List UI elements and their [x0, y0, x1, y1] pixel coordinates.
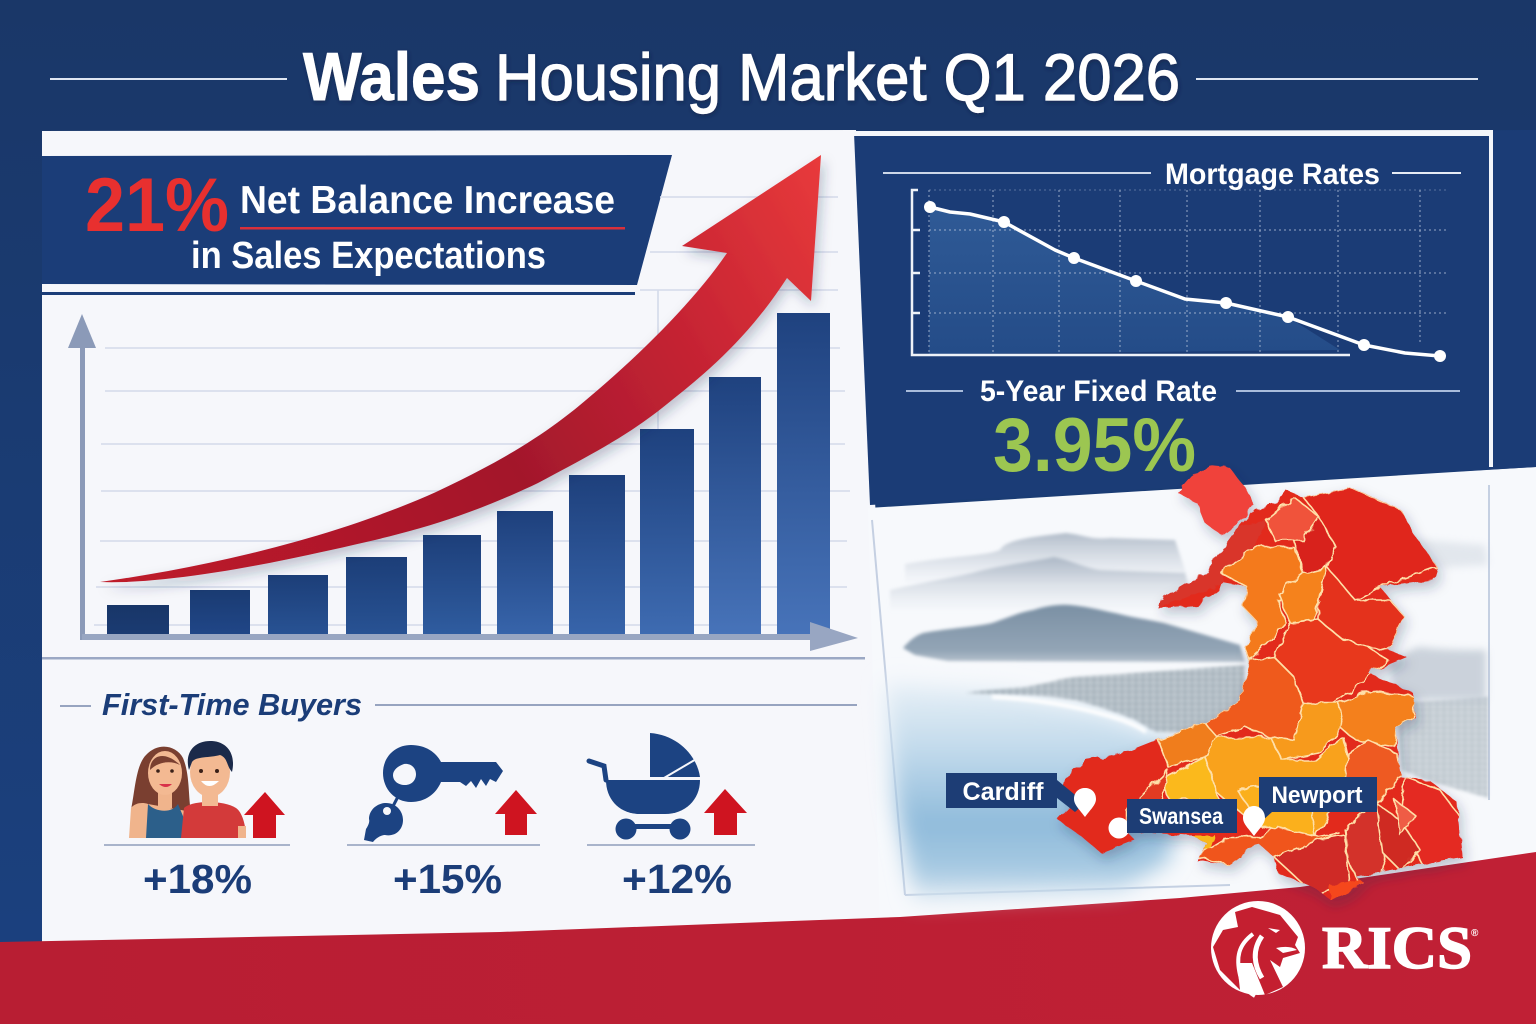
rule — [347, 844, 540, 846]
rate line with markers — [924, 201, 1446, 362]
rule — [587, 844, 755, 846]
footer band — [0, 852, 1536, 1024]
panel: left sales chart and first-time buyers — [42, 130, 905, 945]
icon: up arrow — [495, 790, 537, 835]
beach — [992, 697, 1146, 732]
red growth arrow — [100, 155, 821, 582]
headline line two: in Sales Expectations — [191, 235, 546, 277]
title: Housing Market Q1 2026 — [495, 40, 1180, 114]
divider — [42, 657, 865, 660]
icon: key — [364, 745, 503, 842]
foreground hill — [903, 605, 1245, 662]
section: first-time buyers — [60, 687, 857, 902]
registered mark: ® — [1471, 928, 1479, 939]
rule — [104, 844, 290, 846]
grid — [929, 190, 1447, 354]
icon: couple — [129, 741, 246, 838]
banner: sales expectations — [42, 155, 672, 295]
bar chart: rising sales expectations — [68, 155, 858, 651]
icon: up arrow — [704, 789, 747, 835]
icon: up arrow — [244, 792, 285, 838]
title: Wales — [303, 39, 480, 115]
label: Newport — [1243, 777, 1377, 836]
wordmark: RICS — [1322, 915, 1472, 981]
fixed rate value: 3.95% — [993, 403, 1196, 488]
lion roundel — [1211, 901, 1305, 996]
logo: RICS — [1211, 901, 1479, 996]
distant right hills — [1400, 538, 1488, 570]
map: Wales regions — [1050, 465, 1470, 905]
stat: +18%: +18% — [143, 856, 252, 902]
Anglesey — [1178, 465, 1254, 535]
panel: white map backdrop — [868, 467, 1536, 925]
x axis arrow — [82, 622, 858, 651]
section heading: First-Time Buyers — [102, 687, 362, 722]
map labels — [946, 773, 1377, 838]
y axis arrow — [68, 314, 96, 640]
label: Newport: Newport — [1272, 782, 1363, 809]
stat: +15%: +15% — [393, 856, 502, 902]
shaded area — [929, 207, 1340, 354]
stat: +12%: +12% — [622, 856, 732, 902]
chart heading: Mortgage Rates — [1165, 158, 1380, 191]
line chart: mortgage rates — [883, 158, 1461, 488]
headline line one: Net Balance Increase — [240, 179, 615, 222]
label: Swansea — [1108, 799, 1237, 838]
mainland — [1050, 480, 1470, 905]
eastern hills — [1390, 647, 1486, 700]
label: Swansea: Swansea — [1139, 803, 1223, 829]
label: Cardiff: Cardiff — [962, 778, 1044, 806]
mid hills — [890, 557, 1195, 612]
axes — [912, 190, 1350, 355]
panel: mortgage rates — [854, 130, 1536, 505]
far hills — [905, 533, 1190, 585]
eastern town — [1396, 697, 1488, 798]
headline figure 21%: 21% — [85, 163, 229, 248]
panel: coastal landscape — [872, 485, 1489, 900]
bars — [107, 313, 830, 634]
title — [50, 39, 1478, 115]
map frame — [872, 485, 1489, 895]
icon: stroller — [589, 733, 700, 840]
peninsula — [966, 665, 1245, 733]
fixed rate label: 5-Year Fixed Rate — [980, 375, 1217, 408]
label: Cardiff — [946, 773, 1096, 817]
sea — [885, 682, 1180, 900]
